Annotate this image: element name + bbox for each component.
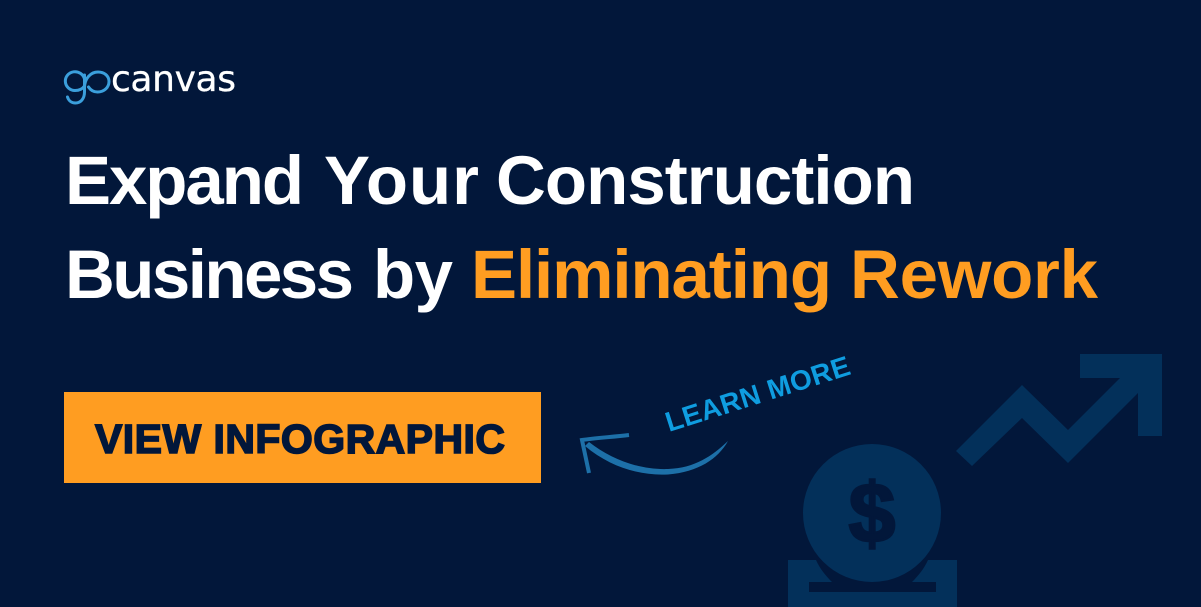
- button label: VIEW INFOGRAPHIC: [95, 416, 505, 462]
- title line 2: Business: [65, 236, 354, 313]
- arrow: hand-drawn curved arrow: [582, 435, 728, 475]
- slot tray: [788, 560, 957, 607]
- dollar sign: $: [849, 466, 895, 560]
- title: [65, 142, 1099, 313]
- button: view infographic: [64, 392, 541, 483]
- coin: [803, 444, 941, 582]
- title line 2: Eliminating: [471, 236, 832, 313]
- title line 1: Expand: [65, 142, 304, 219]
- icon: rising trend arrow: [956, 354, 1162, 466]
- logo wordmark: canvas: [111, 59, 236, 100]
- title line 1: Construction: [496, 142, 915, 219]
- title line 2: by: [373, 236, 453, 313]
- logo: gocanvas: [65, 59, 236, 103]
- icon: coin dropping into slot: [788, 444, 957, 607]
- title line 2: Rework: [850, 236, 1099, 313]
- title line 1: Your: [324, 142, 479, 219]
- icon: go loop symbol: [65, 72, 109, 103]
- callout: learn more: LEARN MORE: [661, 350, 854, 438]
